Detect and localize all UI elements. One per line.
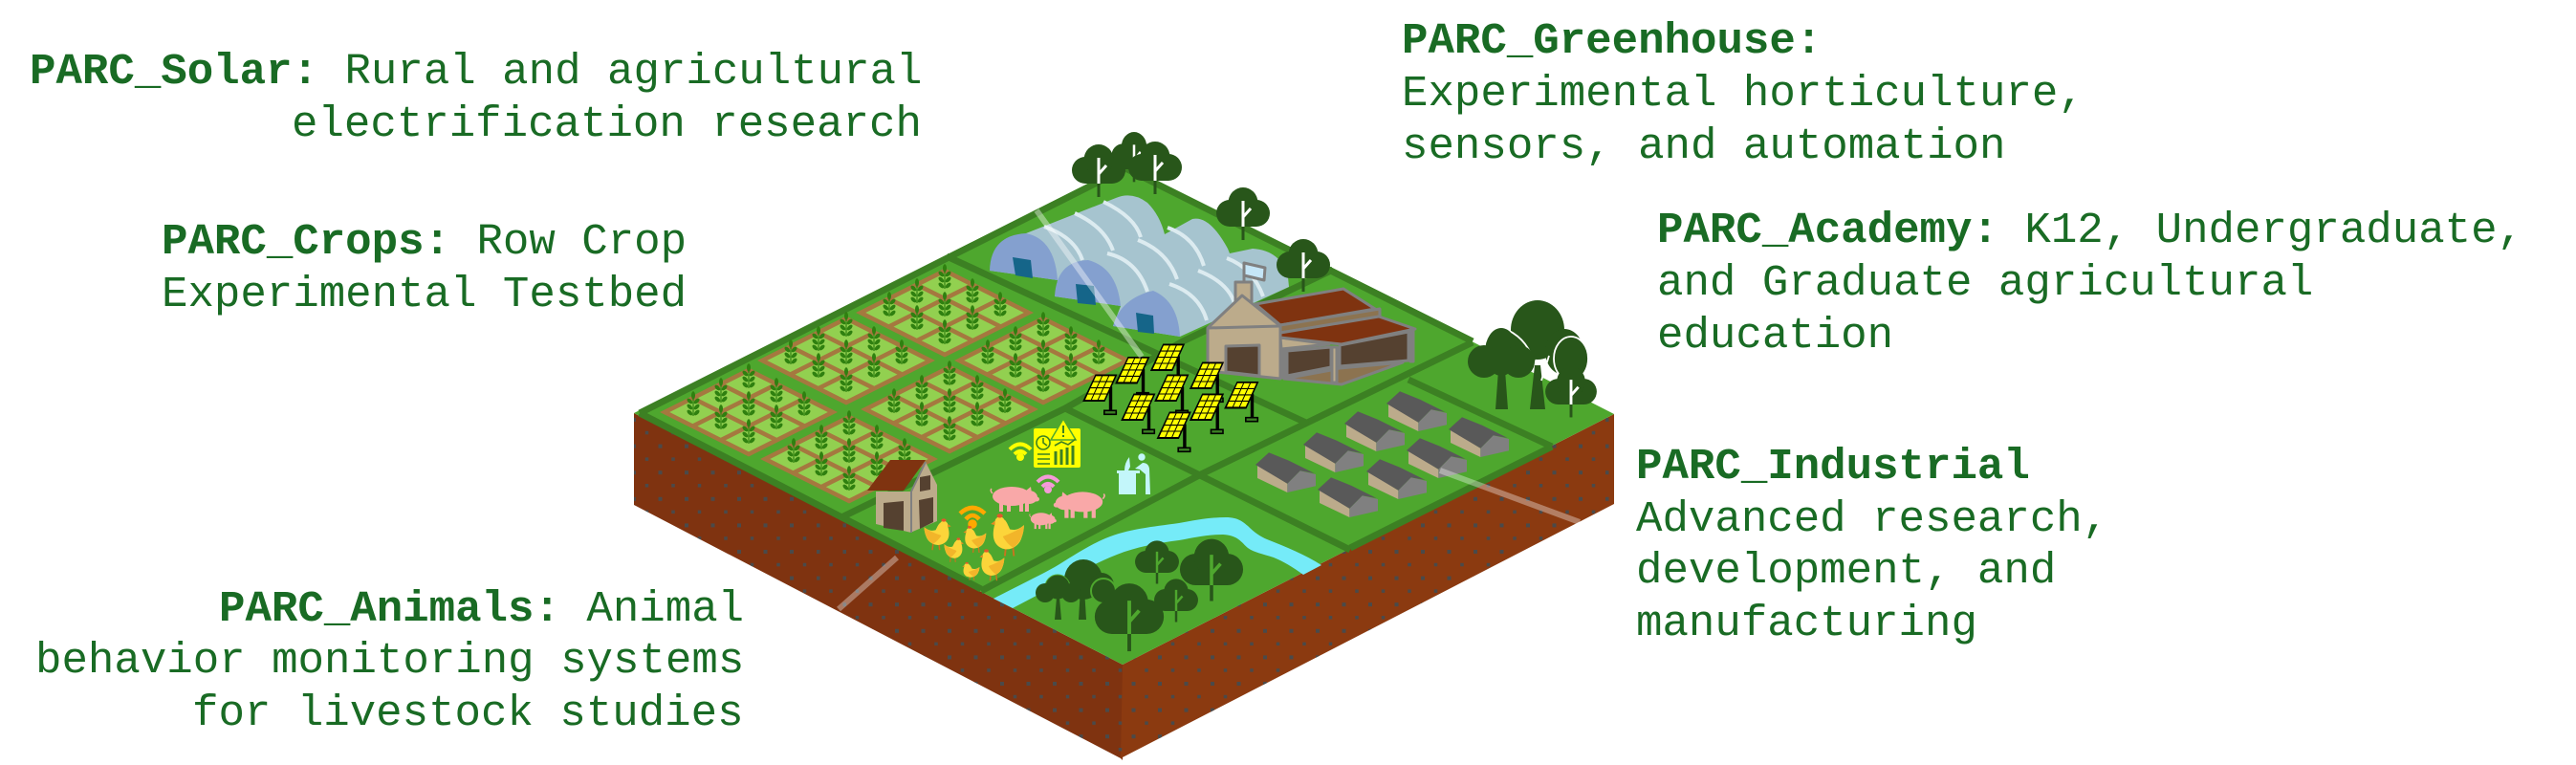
label: PARC_Crops: Experimental Testbed xyxy=(162,270,687,319)
label: PARC_Academy: and Graduate agricultural xyxy=(1657,258,2313,308)
trees: forest by the river xyxy=(1036,539,1243,651)
label: PARC_Industrial: Advanced research, xyxy=(1636,494,2108,544)
crop beds xyxy=(660,264,1132,503)
leader line: animals xyxy=(839,557,897,609)
leader line: solar xyxy=(1037,210,1142,357)
label: PARC_Solar: PARC_Solar: Rural and agricultural xyxy=(30,47,922,97)
small barn xyxy=(867,460,937,533)
greenhouses xyxy=(990,195,1289,337)
label: PARC_Animals xyxy=(35,584,744,738)
isometric farm block xyxy=(634,132,1614,760)
trees: top right cluster xyxy=(1468,300,1597,417)
label: PARC_Solar: electrification research xyxy=(292,99,922,149)
label: PARC_Greenhouse: sensors, and automation xyxy=(1402,121,2005,171)
teacher at lectern icon xyxy=(1117,453,1150,494)
grass surface xyxy=(634,164,1614,665)
label: PARC_Solar xyxy=(30,47,922,149)
main barn building xyxy=(1208,263,1415,384)
label: PARC_Greenhouse xyxy=(1402,16,2085,171)
soil: left face xyxy=(634,413,1123,760)
label: PARC_Industrial: PARC_Industrial xyxy=(1636,442,2030,492)
label: PARC_Animals: for livestock studies xyxy=(192,688,744,738)
field dividers and borders xyxy=(640,168,1552,591)
label: PARC_Academy: education xyxy=(1657,311,1893,361)
label: PARC_Crops xyxy=(162,217,687,319)
leader line: industrial xyxy=(1440,470,1580,522)
chickens xyxy=(925,514,1024,580)
label: PARC_Crops: PARC_Crops: Row Crop xyxy=(162,217,687,267)
label: PARC_Animals: PARC_Animals: Animal xyxy=(219,584,744,634)
pigs xyxy=(991,487,1104,529)
wifi icon: orange xyxy=(960,508,985,526)
label: PARC_Academy: PARC_Academy: K12, Undergraduate, xyxy=(1657,206,2523,255)
solar panels xyxy=(1083,344,1257,451)
industrial houses xyxy=(1255,391,1509,517)
sensor dashboard icon xyxy=(1034,419,1081,468)
label: PARC_Animals: behavior monitoring systems xyxy=(35,636,744,686)
river xyxy=(993,517,1321,608)
label: PARC_Academy xyxy=(1657,206,2523,361)
label: PARC_Greenhouse: PARC_Greenhouse: xyxy=(1402,16,1822,66)
label: PARC_Industrial: manufacturing xyxy=(1636,599,1977,648)
label: PARC_Greenhouse: Experimental horticulture, xyxy=(1402,69,2085,119)
wifi icon: yellow xyxy=(1010,444,1031,459)
label: PARC_Industrial xyxy=(1636,442,2108,648)
wifi icon: pink xyxy=(1037,476,1059,492)
soil: right face xyxy=(1121,414,1614,758)
trees: top cluster xyxy=(1072,132,1330,292)
label: PARC_Industrial: development, and xyxy=(1636,546,2056,596)
